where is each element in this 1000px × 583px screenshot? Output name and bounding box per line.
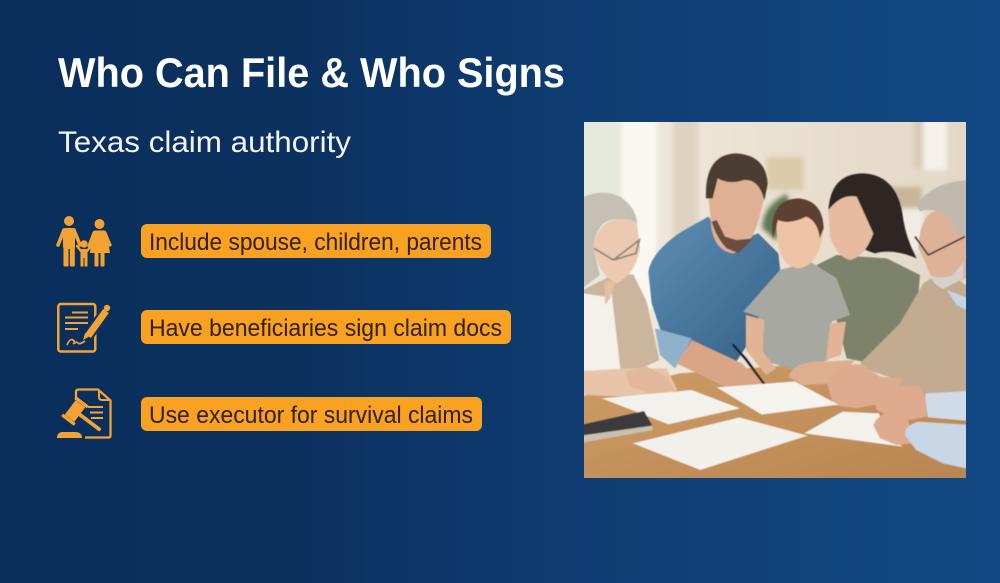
label: include spouse: Include spouse, children, parents (149, 229, 482, 256)
list item: executor (57, 390, 482, 440)
table (584, 365, 966, 478)
title: Who Can File & Who Signs (58, 49, 565, 96)
photo: family signing documents (584, 122, 966, 478)
label: use executor: Use executor for survival claims (149, 402, 473, 429)
pill: have beneficiaries sign (141, 310, 511, 344)
label: have beneficiaries sign: Have beneficiaries sign claim docs (149, 315, 502, 342)
icon: signed document (58, 304, 110, 352)
subtitle: Texas claim authority (58, 126, 351, 159)
room background (584, 122, 966, 396)
mother (817, 255, 920, 362)
pill: include spouse (141, 224, 491, 258)
grandmother (573, 274, 659, 378)
list item: beneficiaries sign (58, 304, 511, 352)
papers (573, 381, 973, 470)
child (743, 262, 850, 370)
pill: use executor (141, 397, 482, 431)
list item: include family (58, 216, 491, 266)
icon: family (58, 216, 110, 266)
bottom-right hands (873, 386, 927, 420)
father (648, 217, 782, 363)
grandfather (860, 278, 966, 394)
icon: gavel and document (57, 390, 110, 440)
